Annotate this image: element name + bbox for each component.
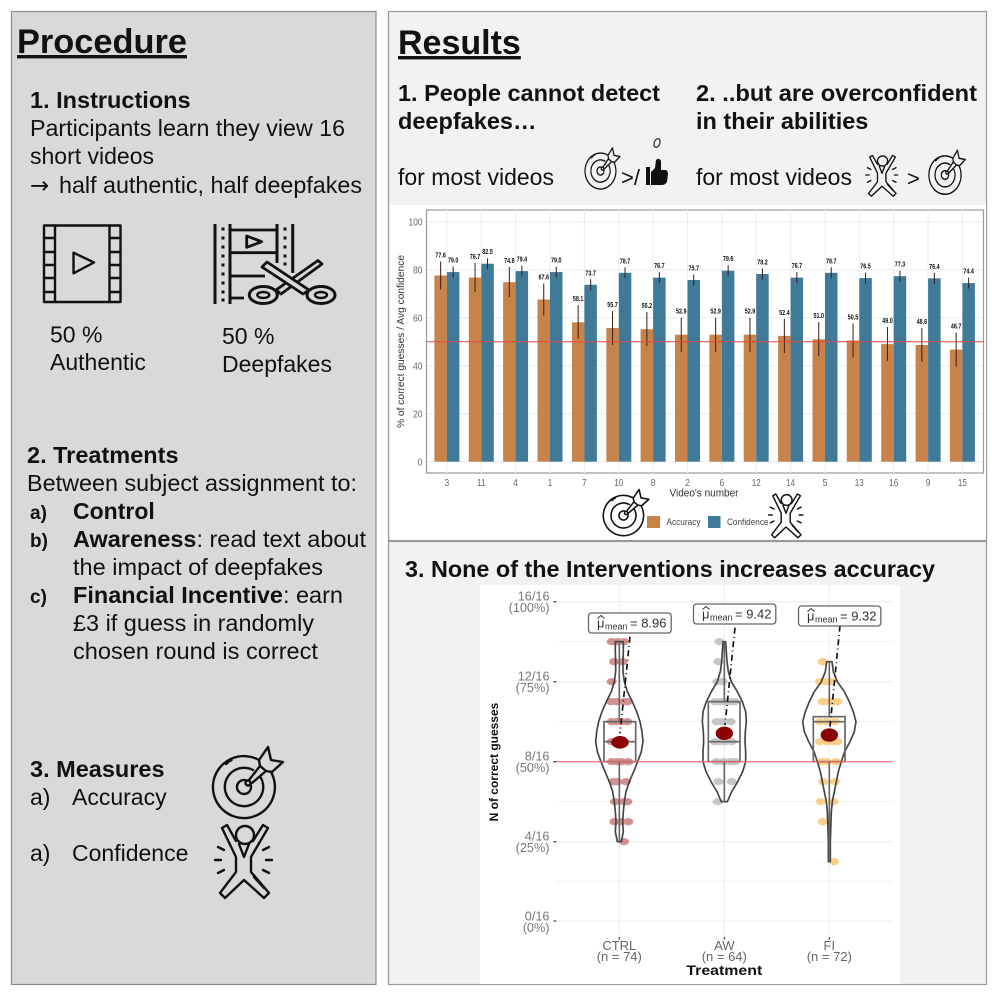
x axis labels: 11	[477, 478, 486, 489]
y axis labels: 80	[413, 266, 423, 276]
x axis labels: 1	[548, 478, 553, 489]
x axis labels: 10	[614, 478, 624, 489]
text block: measures: 3. Measures	[30, 756, 165, 782]
text block: finding 2: in their abilities	[696, 108, 868, 134]
text block: instructions: →	[30, 173, 49, 199]
text block: treatments: Financial Incentive: earn	[73, 582, 343, 608]
panel: results	[388, 12, 986, 540]
text block: finding 2: for most videos	[696, 164, 852, 190]
text block: measures: Confidence	[72, 840, 188, 866]
text block: treatments: b)	[30, 531, 48, 552]
icon: target	[213, 747, 283, 818]
y axis labels: 40	[413, 362, 423, 372]
x axis labels: 3	[445, 478, 450, 489]
text block: measures: a)	[30, 840, 50, 866]
violin and box: control	[596, 642, 643, 842]
heading: procedure: Procedure	[17, 23, 187, 61]
x axis labels	[445, 478, 967, 489]
heading: results: Results	[398, 24, 521, 62]
bars: video 11	[469, 249, 494, 462]
points: awareness	[710, 638, 740, 805]
bars: video 10	[606, 258, 631, 462]
legend	[603, 490, 803, 538]
bars: video 14: 76.7	[792, 263, 802, 270]
y axis labels: (75%)	[516, 681, 550, 695]
text block: instructions: Participants learn they view 16	[30, 115, 345, 141]
text block: instructions	[30, 87, 362, 199]
x axis labels: (n = 64)	[702, 949, 747, 964]
bars: video 5	[812, 258, 838, 462]
text block: finding 1: deepfakes…	[398, 108, 536, 134]
mean markers	[611, 727, 838, 749]
mean label: control: = 8.96	[630, 616, 667, 630]
violin and box: financial incentive	[803, 662, 856, 862]
bars: video 10: 78.7	[620, 258, 630, 265]
text block: measures	[30, 756, 188, 866]
x axis labels: 14	[786, 478, 795, 489]
text block: finding 2: 2. ..but are overconfident	[696, 80, 977, 106]
bars: video 9: 76.4	[929, 264, 940, 271]
text: 50% authentic: Authentic	[50, 349, 146, 375]
bars: video 13: 76.5	[860, 264, 871, 271]
bars: video 15	[950, 269, 975, 462]
text block: treatments: a)	[30, 503, 47, 524]
legend: Confidence	[727, 517, 768, 528]
mean label: control: μ	[597, 616, 604, 630]
mean label: control: mean	[605, 622, 628, 632]
bars: video 10: 55.7	[607, 302, 618, 309]
text block: treatments: chosen round is correct	[73, 638, 319, 664]
y axis labels: 20	[413, 410, 423, 420]
x axis labels: 8	[651, 478, 656, 489]
mean label: awareness: = 9.42	[735, 606, 772, 622]
bars: video 16: 49.0	[882, 318, 893, 325]
text: 50% deepfakes	[222, 323, 332, 377]
y axis labels: (25%)	[516, 841, 550, 855]
icon: confidence beats accuracy: >	[907, 166, 920, 191]
text block: treatments: Control	[73, 498, 155, 524]
bars: video 16: 77.3	[895, 262, 905, 269]
mean label: awareness: μ	[702, 606, 710, 622]
text block: measures: Accuracy	[72, 784, 167, 810]
legend: Accuracy	[666, 517, 701, 528]
mean label: control	[588, 613, 671, 633]
bars: video 1: 79.0	[551, 258, 562, 265]
panel: interventions	[388, 542, 986, 984]
text block: measures: a)	[30, 784, 50, 810]
text block: finding 1	[398, 80, 660, 190]
bars: video 8	[641, 263, 666, 462]
text block: treatments: 2. Treatments	[27, 442, 179, 468]
icon: target beats chance: >/	[621, 165, 641, 190]
bars: video 4: 79.4	[517, 257, 527, 264]
bars: video 12: 78.2	[757, 260, 768, 266]
icon: confidence beats accuracy	[866, 150, 965, 196]
y axis labels: 0	[418, 458, 423, 468]
x axis labels: 9	[926, 478, 931, 489]
violin and box: awareness	[702, 642, 746, 802]
y axis labels: 8/16	[525, 750, 550, 764]
y axis labels: 4/16	[525, 830, 550, 844]
text block: instructions: 1. Instructions	[30, 87, 191, 113]
bars: video 8: 55.2	[642, 303, 652, 310]
bars: video 13	[847, 264, 872, 462]
bars: video 12	[744, 260, 769, 462]
bars: video 2	[675, 266, 700, 462]
bars: video 3	[434, 252, 459, 462]
x axis labels: (n = 74)	[597, 949, 642, 964]
bars: video 11: 76.7	[470, 254, 480, 261]
y axis labels: 16/16	[518, 590, 550, 604]
bars: video 1: 67.6	[538, 274, 549, 282]
text block: treatments: Awareness: read text about	[73, 526, 367, 552]
plot shapes	[553, 585, 893, 940]
text block: treatments: c)	[30, 587, 47, 608]
bars: video 7: 73.7	[585, 270, 596, 277]
mean label: financial incentive: mean	[815, 614, 838, 624]
y axis labels	[408, 218, 423, 468]
bars: video 6: 79.6	[723, 256, 733, 263]
x axis labels: 16	[889, 478, 899, 489]
bars: video 2: 75.7	[688, 266, 699, 272]
icon: authentic film	[44, 226, 120, 302]
text: 50% deepfakes: 50 %	[222, 323, 274, 349]
y axis title: % of correct guesses / Avg confidence	[395, 255, 407, 428]
icon: confident person	[215, 825, 272, 898]
bars: video 16	[881, 262, 906, 462]
x axis labels: 2	[685, 478, 690, 489]
bars: video 1	[538, 258, 562, 462]
points: control	[606, 638, 633, 845]
text block: treatments: Between subject assignment to:	[27, 470, 357, 496]
bars: video 7	[572, 270, 597, 462]
bars: video 13: 50.5	[848, 314, 858, 322]
bars: video 12: 52.9	[745, 309, 755, 316]
x axis labels: FI	[824, 938, 835, 953]
bars: video 5: 51.0	[814, 313, 824, 320]
x axis labels: 12	[752, 478, 761, 489]
text block: finding 1: for most videos	[398, 164, 554, 190]
x axis labels: 4	[513, 478, 518, 489]
icon: target beats chance	[585, 138, 668, 190]
x axis labels: 7	[582, 478, 587, 489]
x axis labels: CTRL	[602, 938, 636, 953]
text block: instructions: short videos	[30, 143, 154, 169]
y axis title: N of correct guesses	[487, 702, 501, 821]
bars: video 14: 52.4	[779, 310, 790, 317]
bars: video 15: 74.4	[963, 269, 974, 276]
bars: video 15: 46.7	[951, 324, 961, 331]
reference line at 50 percent	[427, 341, 984, 343]
panel: procedure	[12, 12, 376, 984]
bars: video 7: 58.1	[573, 296, 583, 303]
mean label: financial incentive: μ	[807, 608, 814, 624]
bars: video 3: 79.0	[448, 258, 458, 265]
x axis labels: 6	[720, 478, 725, 489]
heading: finding 3: 3. None of the Interventions increases accuracy	[405, 556, 935, 582]
mean label: financial incentive	[798, 606, 881, 626]
y axis labels: (100%)	[509, 601, 550, 615]
mean label: awareness: mean	[710, 612, 733, 622]
y axis labels: 60	[413, 314, 423, 324]
mean label: financial incentive: = 9.32	[840, 608, 877, 624]
bars: video 4: 74.8	[504, 258, 515, 265]
text: 50% deepfakes: Deepfakes	[222, 351, 332, 377]
bars: video 8: 76.7	[654, 263, 665, 270]
y axis labels: 100	[408, 218, 423, 228]
bar chart: accuracy and confidence by video	[390, 205, 986, 540]
mean label: awareness	[694, 604, 776, 624]
x axis labels: 5	[823, 478, 828, 489]
x axis labels: 15	[958, 478, 967, 489]
text block: instructions: half authentic, half deepfakes	[59, 172, 362, 198]
mean connector lines	[620, 626, 840, 733]
bars: video 9	[916, 264, 941, 462]
text block: finding 2	[696, 80, 977, 190]
x axis title: Video's number	[670, 488, 739, 500]
bars: video 11: 82.5	[482, 249, 493, 256]
x axis labels: AW	[714, 938, 735, 953]
y axis labels: 0/16	[525, 910, 550, 924]
x axis labels	[597, 938, 852, 964]
x axis labels: (n = 72)	[807, 949, 852, 964]
x axis labels: 13	[855, 478, 864, 489]
bars: video 5: 78.7	[826, 258, 837, 265]
bars: video 14	[778, 263, 803, 462]
violin chart: correct guesses by treatment	[480, 585, 900, 984]
x axis title: Treatment	[686, 963, 763, 978]
y axis labels	[509, 590, 550, 935]
bars: video 6: 52.9	[710, 309, 721, 316]
y axis labels: (50%)	[516, 761, 550, 775]
text block: treatments: the impact of deepfakes	[73, 554, 323, 580]
text block: treatments	[27, 442, 367, 664]
y axis labels: (0%)	[523, 921, 550, 935]
bars: video 6	[709, 256, 734, 462]
points: financial incentive	[815, 658, 842, 865]
text block: finding 1: 1. People cannot detect	[398, 80, 660, 106]
bars: video 4	[503, 257, 528, 462]
bars: video 9: 48.6	[917, 319, 927, 326]
text block: treatments: £3 if guess in randomly	[73, 610, 315, 636]
bars: video 2: 52.9	[676, 309, 687, 316]
icon: deepfake film and scissors	[215, 224, 335, 304]
text: 50% authentic: 50 %	[50, 322, 102, 348]
text: 50% authentic	[50, 322, 146, 375]
reference line at 50 percent	[556, 760, 893, 763]
y axis labels: 12/16	[518, 670, 550, 684]
bars: video 3: 77.6	[435, 252, 446, 260]
